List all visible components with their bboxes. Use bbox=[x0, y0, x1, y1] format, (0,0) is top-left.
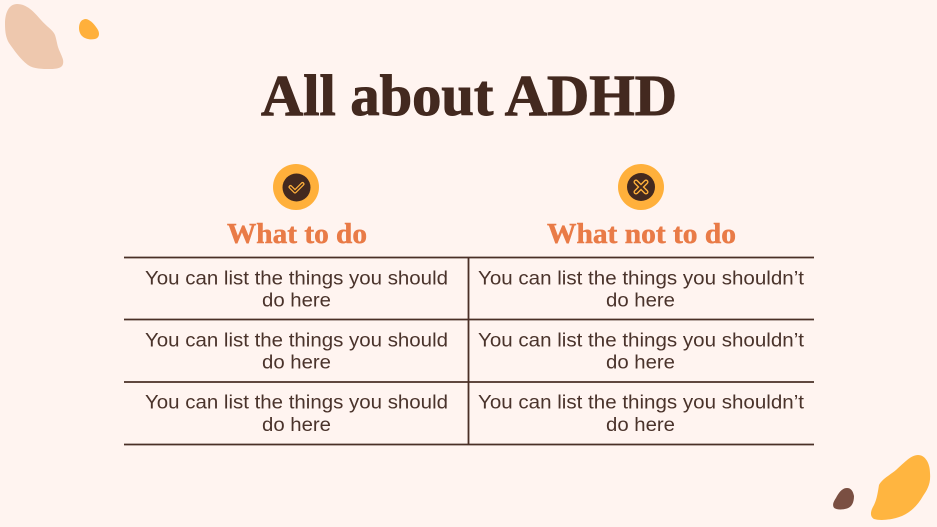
heading: what to do: What to do bbox=[227, 219, 367, 250]
row 1: shouldn't: do here bbox=[606, 290, 675, 312]
decoration: bottom-right brown blob bbox=[833, 488, 854, 509]
row 3: shouldn't: do here bbox=[606, 414, 675, 436]
row 3: shouldn't bbox=[478, 392, 805, 436]
decoration: top-left yellow blob bbox=[79, 19, 99, 39]
row 1: should: do here bbox=[262, 290, 331, 312]
decoration: bottom-right yellow blob bbox=[871, 455, 930, 520]
row 3: should: You can list the things you should bbox=[145, 392, 448, 414]
heading: what not to do: What not to do bbox=[547, 219, 736, 250]
title: All about ADHD bbox=[261, 63, 677, 128]
row 2: should: do here bbox=[262, 352, 331, 374]
row 1: shouldn't: You can list the things you shouldn’t bbox=[478, 268, 805, 290]
row 3: shouldn't: You can list the things you shouldn’t bbox=[478, 392, 805, 414]
row 1: should: You can list the things you should bbox=[145, 268, 448, 290]
row 2: shouldn't bbox=[478, 330, 805, 374]
row 3: should bbox=[145, 392, 448, 436]
row 3: should: do here bbox=[262, 414, 331, 436]
row 2: should: You can list the things you should bbox=[145, 330, 448, 352]
icon: cross mark bbox=[618, 164, 664, 210]
row 2: shouldn't: do here bbox=[606, 352, 675, 374]
decoration: top-left peach blob bbox=[5, 4, 63, 69]
table grid bbox=[124, 257, 814, 445]
row 1: shouldn't bbox=[478, 268, 805, 312]
icon: check mark bbox=[273, 164, 319, 210]
row 1: should bbox=[145, 268, 448, 312]
row 2: shouldn't: You can list the things you shouldn’t bbox=[478, 330, 805, 352]
row 2: should bbox=[145, 330, 448, 374]
